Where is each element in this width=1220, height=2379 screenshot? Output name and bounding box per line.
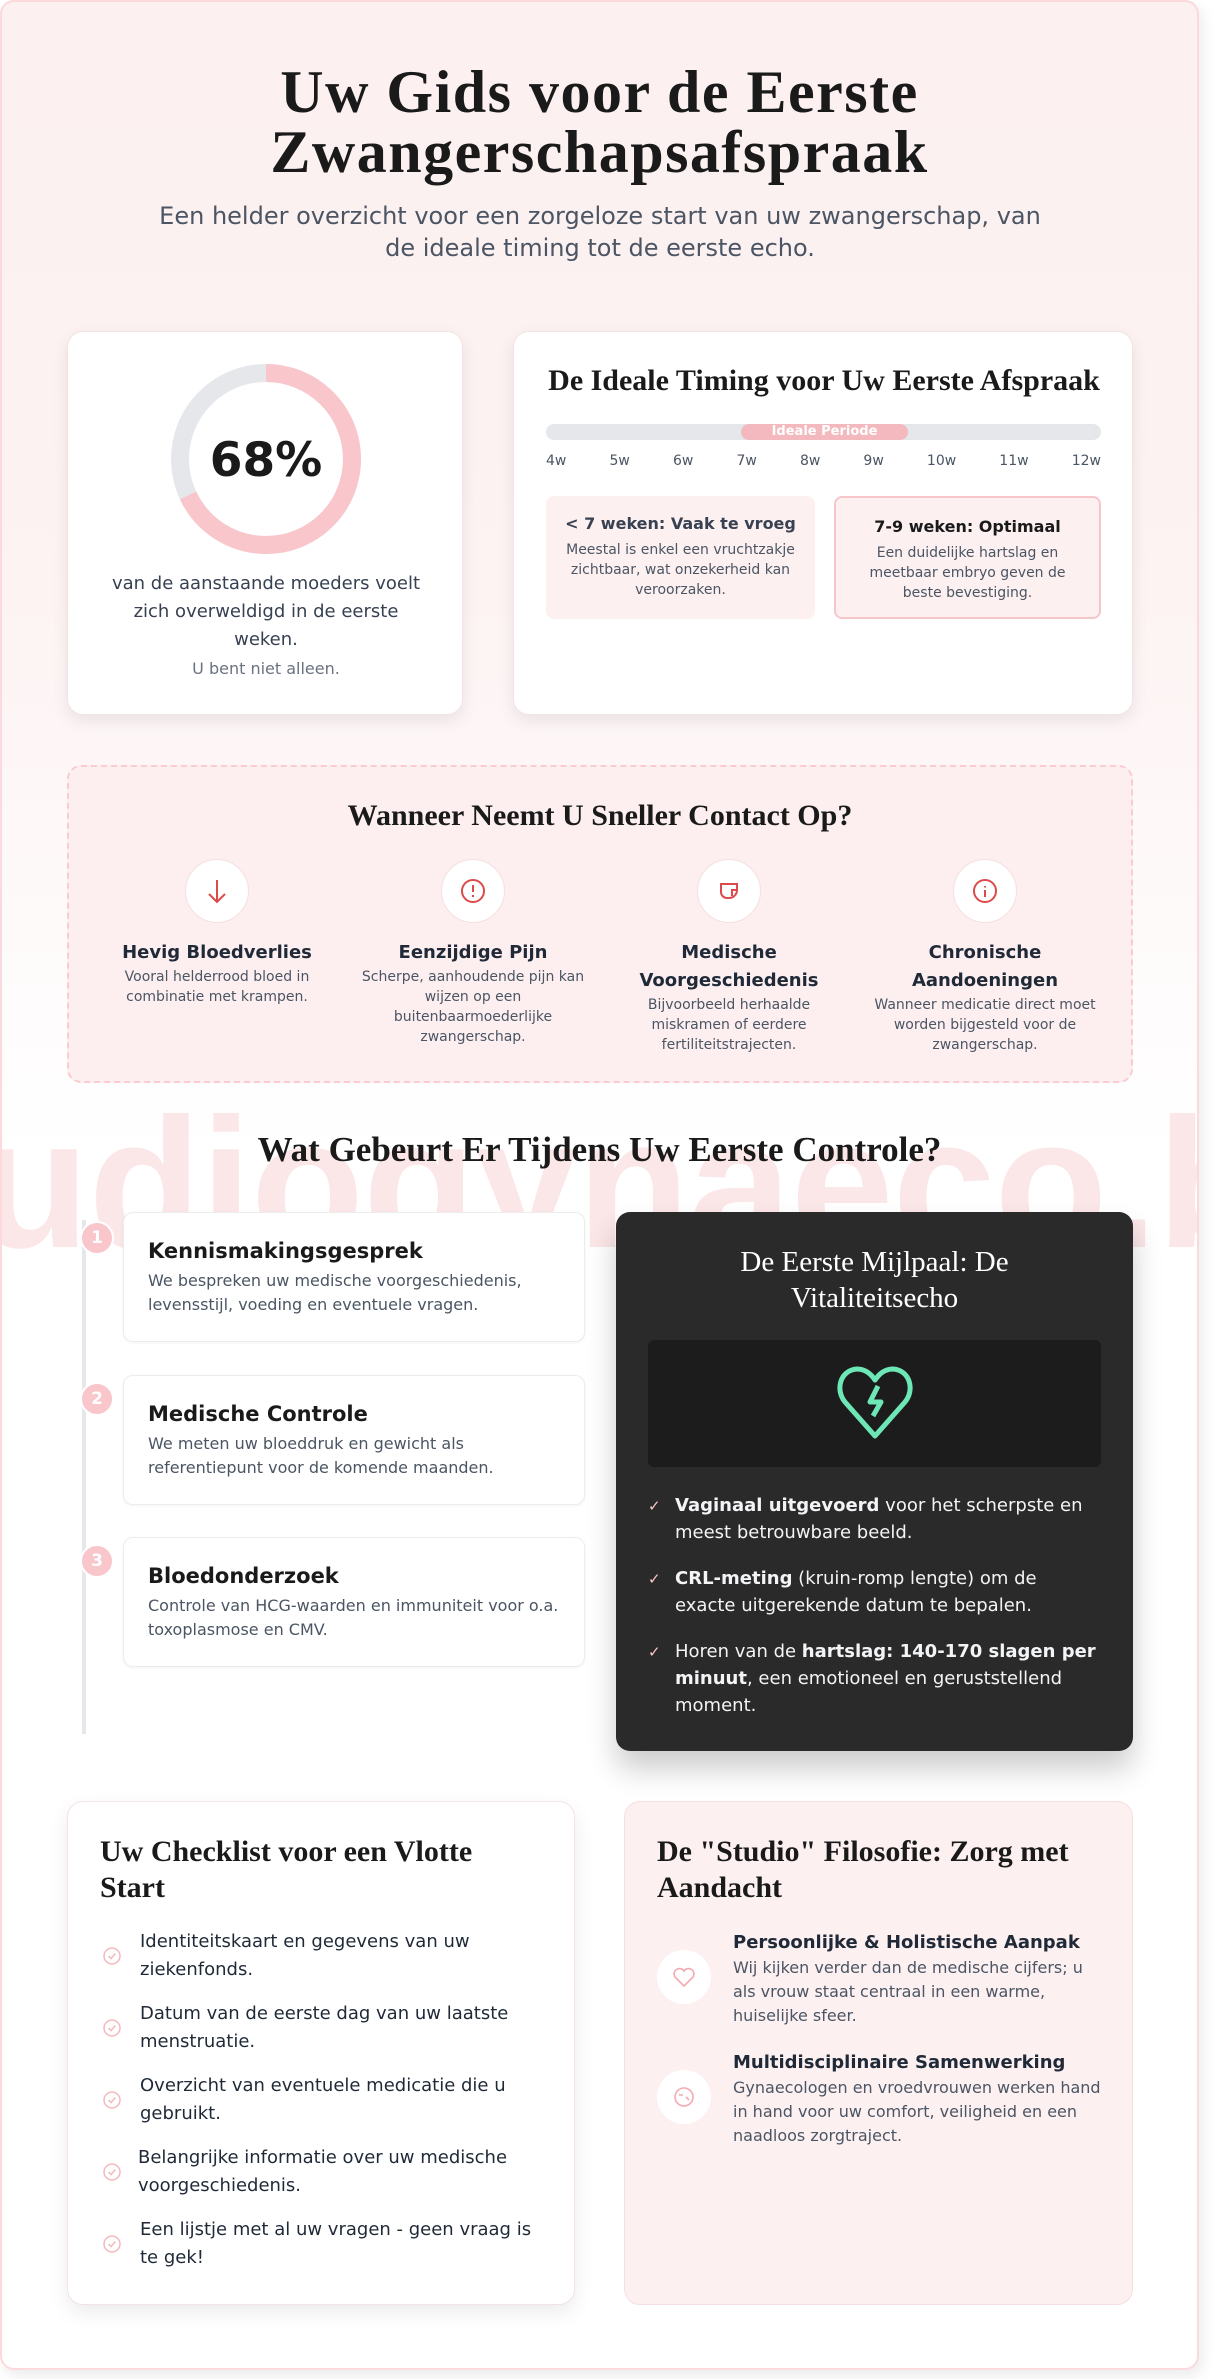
item: chronic conditions: Wanneer medicatie direct moet worden bijgesteld voor de zwangerschap.	[874, 997, 1096, 1053]
item: heavy bleeding: Vooral helderrood bloed in combinatie met krampen.	[125, 969, 309, 1005]
timeline bar: Ideale Periode	[772, 424, 877, 439]
item: one-sided pain: Scherpe, aanhoudende pijn kan wijzen op een buitenbaarmoederlijke zwangerschap.	[362, 969, 584, 1045]
item: personal approach	[657, 1932, 1083, 2025]
item: heavy bleeding: Hevig Bloedverlies	[122, 942, 312, 963]
step 1	[82, 1212, 585, 1342]
section heading: first check-up: Wat Gebeurt Er Tijdens Uw Eerste Controle?	[258, 1130, 941, 1169]
icon: heart pulse	[648, 1340, 1101, 1467]
icon: team	[657, 2070, 711, 2124]
step 1: 1	[91, 1228, 103, 1248]
checklist of scan facts: Horen van de hartslag: 140-170 slagen per minuut, een emotioneel en geruststellend moment.	[675, 1641, 1096, 1716]
item: personal approach: Wij kijken verder dan de medische cijfers; u als vrouw staat centraal in een warme, huiselijke sfeer.	[733, 1958, 1083, 2025]
panel: checklist	[67, 1801, 575, 2305]
step 2	[82, 1375, 585, 1505]
week labels: 4w	[546, 453, 566, 469]
step 3: Controle van HCG-waarden en immuniteit voor o.a. toxoplasmose en CMV.	[148, 1596, 558, 1639]
checklist of scan facts: ✓	[648, 1497, 661, 1515]
item: medical history: Medische	[681, 942, 777, 963]
title: Zwangerschapsafspraak	[270, 119, 929, 185]
icon: info	[953, 859, 1017, 923]
step 3: 3	[91, 1551, 103, 1571]
item: medical history: Voorgeschiedenis	[639, 970, 818, 991]
checklist of scan facts: CRL-meting (kruin-romp lengte) om de exacte uitgerekende datum te bepalen.	[675, 1568, 1037, 1616]
contact heading: Wanneer Neemt U Sneller Contact Op?	[348, 799, 852, 832]
checklist items: Overzicht van eventuele medicatie die u gebruikt.	[140, 2075, 506, 2124]
stat note: U bent niet alleen.	[192, 659, 340, 678]
item: heavy bleeding	[122, 859, 312, 1005]
item: chronic conditions	[874, 859, 1096, 1053]
donut chart 68%: 68%	[210, 433, 322, 488]
item: chronic conditions: Chronische	[929, 942, 1041, 963]
icon: alert	[441, 859, 505, 923]
panel: ideal timing	[513, 331, 1133, 715]
title	[270, 59, 929, 186]
checklist items: Datum van de eerste dag van uw laatste menstruatie.	[140, 2003, 508, 2052]
checklist of scan facts: Vaginaal uitgevoerd voor het scherpste en meest betrouwbare beeld.	[675, 1495, 1083, 1543]
timeline line	[82, 1220, 86, 1734]
icon: arrow down	[185, 859, 249, 923]
week labels: 9w	[863, 453, 884, 469]
item: chronic conditions: Aandoeningen	[912, 970, 1058, 991]
week labels	[546, 453, 1101, 469]
item: one-sided pain	[362, 859, 584, 1045]
item: multidisciplinary: Multidisciplinaire Samenwerking	[733, 2052, 1065, 2073]
subtitle: Een helder overzicht voor een zorgeloze start van uw zwangerschap, van de ideale timing tot de eerste echo.	[159, 202, 1041, 262]
panel: statistic	[67, 331, 463, 715]
checklist of scan facts	[648, 1495, 1096, 1716]
week labels: 8w	[800, 453, 820, 469]
item: multidisciplinary	[657, 2052, 1101, 2145]
step 2: Medische Controle	[148, 1402, 368, 1426]
week labels: 7w	[736, 453, 757, 469]
week labels: 12w	[1072, 453, 1101, 469]
box: optimal: Een duidelijke hartslag en meetbaar embryo geven de beste bevestiging.	[869, 545, 1066, 601]
box: too early: < 7 weken: Vaak te vroeg	[565, 514, 796, 533]
box: optimal: 7-9 weken: Optimaal	[874, 517, 1061, 536]
timeline bar	[546, 424, 1101, 440]
icon: heart	[657, 1950, 711, 2004]
item: multidisciplinary: Gynaecologen en vroedvrouwen werken hand in hand voor uw comfort, veiligheid en een naadloos zorgtraject.	[733, 2078, 1101, 2145]
panel: when to contact sooner	[67, 765, 1133, 1083]
panel: studio philosophy	[624, 1801, 1133, 2305]
checklist heading: Uw Checklist voor een Vlotte Start	[100, 1835, 472, 1904]
philosophy heading: De "Studio" Filosofie: Zorg met Aandacht	[657, 1835, 1069, 1904]
dark panel heading: Vitaliteitsecho	[791, 1282, 958, 1314]
checklist items	[103, 1931, 531, 2268]
stat description: van de aanstaande moeders voelt zich overweldigd in de eerste weken.	[112, 573, 420, 650]
panel: vitality scan	[616, 1212, 1133, 1751]
timeline steps	[82, 1212, 585, 1734]
title: Uw Gids voor de Eerste	[280, 59, 919, 125]
checklist items: Een lijstje met al uw vragen - geen vraag is te gek!	[140, 2219, 531, 2268]
checklist of scan facts: ✓	[648, 1643, 661, 1661]
week labels: 10w	[927, 453, 956, 469]
step 2: 2	[91, 1389, 103, 1409]
checklist items: Identiteitskaart en gegevens van uw ziekenfonds.	[140, 1931, 470, 1980]
week labels: 6w	[673, 453, 693, 469]
box: too early	[546, 496, 815, 619]
dark panel heading: De Eerste Mijlpaal: De	[740, 1246, 1009, 1278]
checklist of scan facts: ✓	[648, 1570, 661, 1588]
week labels: 11w	[999, 453, 1029, 469]
item: medical history: Bijvoorbeeld herhaalde miskramen of eerdere fertiliteitstrajecten.	[648, 997, 810, 1053]
step 3: Bloedonderzoek	[148, 1564, 339, 1588]
item: medical history	[639, 859, 818, 1053]
icon: note	[697, 859, 761, 923]
item: personal approach: Persoonlijke & Holistische Aanpak	[733, 1932, 1080, 1953]
step 3	[82, 1537, 585, 1667]
checklist items: Belangrijke informatie over uw medische voorgeschiedenis.	[138, 2147, 507, 2196]
week labels: 5w	[609, 453, 630, 469]
box: too early: Meestal is enkel een vruchtzakje zichtbaar, wat onzekerheid kan veroorzaken.	[566, 542, 795, 598]
step 2: We meten uw bloeddruk en gewicht als referentiepunt voor de komende maanden.	[148, 1434, 494, 1477]
timing heading: De Ideale Timing voor Uw Eerste Afspraak	[548, 364, 1100, 397]
step 1: Kennismakingsgesprek	[148, 1239, 423, 1263]
box: optimal	[834, 496, 1101, 619]
dark panel heading	[740, 1246, 1009, 1314]
step 1: We bespreken uw medische voorgeschiedenis, levensstijl, voeding en eventuele vragen.	[148, 1271, 522, 1314]
item: one-sided pain: Eenzijdige Pijn	[399, 942, 547, 963]
donut chart 68%	[171, 364, 361, 554]
